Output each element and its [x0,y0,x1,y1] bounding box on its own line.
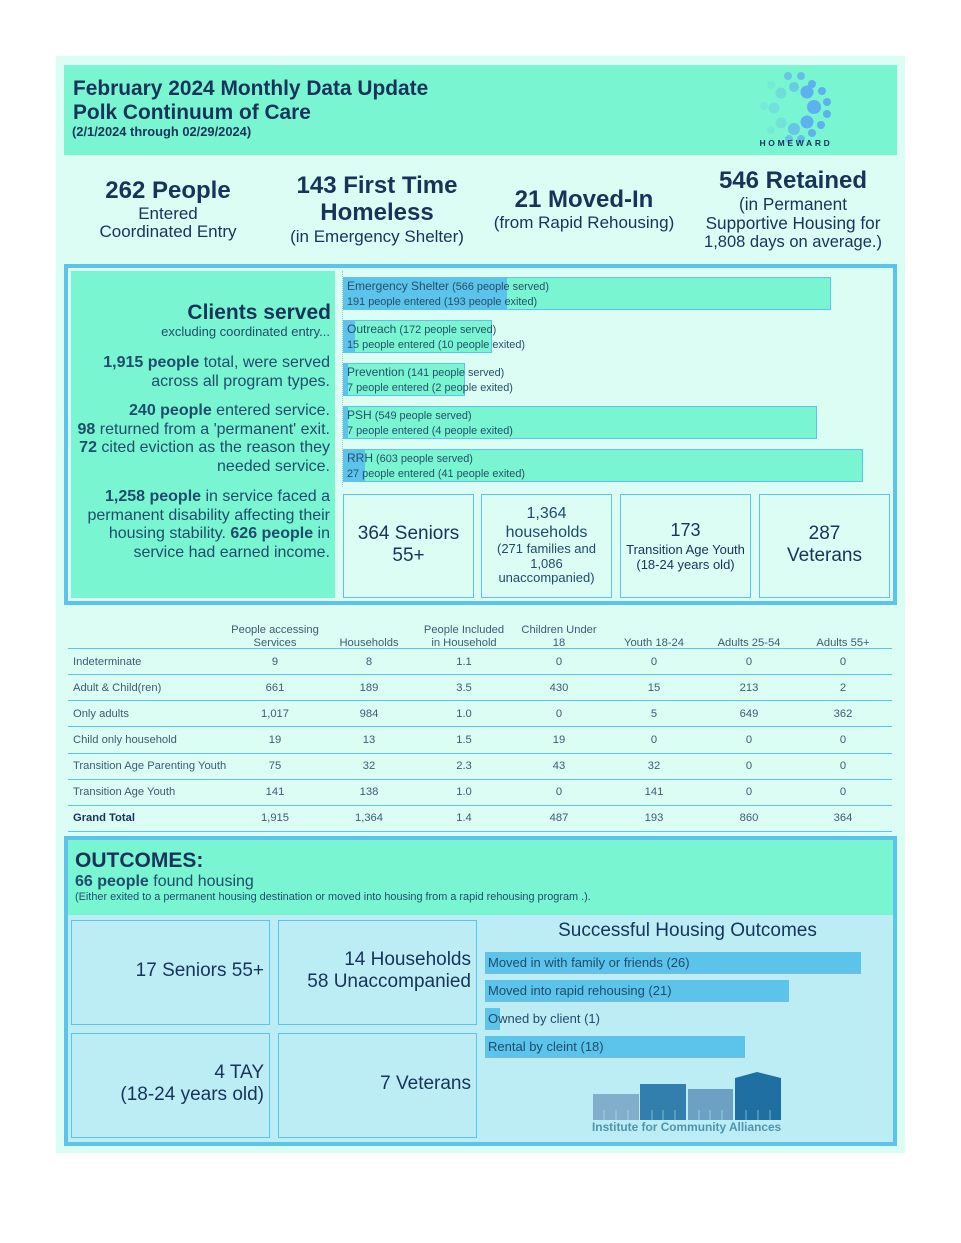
logo: Homeward: HOMEWARD [759,138,833,148]
housing count: 66 people found housing [75,873,254,890]
row: adult and child: 2 [840,682,846,694]
title: February 2024 Monthly Data Update [73,77,428,100]
disability and income: permanent disability affecting their [87,506,330,524]
card: TAY outcome: (18-24 years old) [120,1084,264,1105]
table header: 18 [553,637,565,649]
bar: PSH [343,406,817,439]
row: transition youth: Transition Age Youth [73,786,175,798]
row: child only: 13 [363,734,375,746]
row: grand total: 1,364 [355,812,383,824]
row: grand total: 860 [740,812,758,824]
bar: rental: Rental by cleint (18) [488,1039,604,1054]
card: transition age youth [620,494,751,598]
label: outreach [347,322,525,351]
disability and income: 1,258 people in service faced a [105,488,330,505]
row: transition youth: 0 [746,786,752,798]
row: parenting youth: Transition Age Parenting Youth [73,760,226,772]
entered service: 72 cited eviction as the reason they [79,439,330,456]
card: seniors outcome [71,920,270,1025]
label: prevention [347,365,513,394]
card: seniors [343,494,474,598]
row: transition youth: 141 [645,786,663,798]
table header: Youth 18-24 [624,637,684,649]
row: only adults: 649 [740,708,758,720]
stat: moved in: 21 Moved-In [515,186,653,213]
row: adult and child: 213 [740,682,758,694]
label: RRH [347,451,525,480]
outcomes heading: OUTCOMES: [75,849,203,872]
row: child only: 19 [269,734,281,746]
card: transition age youth: 173 [670,520,701,540]
row: adult and child: 189 [360,682,378,694]
card: transition age youth: Transition Age Youth [626,542,745,556]
card: households outcome [278,920,477,1025]
stat: moved in [494,186,674,232]
row: indeterminate: 0 [556,656,562,668]
row: indeterminate: 1.1 [456,656,472,668]
row: grand total: Grand Total [73,812,135,824]
logo: Institute for Community Alliances [592,1072,781,1134]
card: households [481,494,612,598]
label: emergency shelter: Emergency Shelter (566 people served) [347,279,549,293]
row: indeterminate: 0 [746,656,752,668]
table header: Households [339,637,399,649]
row: parenting youth: 43 [553,760,565,772]
row: transition youth: 0 [840,786,846,798]
table header: Children Under [521,624,597,636]
row: only adults: 1,017 [261,708,289,720]
row: only adults: 362 [834,708,852,720]
title [73,77,428,124]
card: veterans outcome [278,1033,477,1138]
card: seniors outcome: 17 Seniors 55+ [136,960,264,981]
chart heading: Successful Housing Outcomes [558,920,817,941]
row: adult and child: 430 [550,682,568,694]
title: Polk Continuum of Care [73,101,311,124]
text: Owned by client (1) [488,1011,600,1026]
row: adult and child: 3.5 [456,682,472,694]
stat: retained: 546 Retained [719,167,867,194]
stat: first time homeless: Homeless [320,199,434,226]
row: adult and child: 15 [648,682,660,694]
total served [103,354,330,390]
card: households outcome: 14 Households [344,949,471,970]
stat: retained: (in Permanent [739,194,847,214]
total served: across all program types. [151,373,330,390]
label: prevention: Prevention (141 people served) [347,365,504,379]
label: RRH: 27 people entered (41 people exited) [347,468,525,480]
row: parenting youth: 0 [840,760,846,772]
bar: rapid rehousing [485,980,789,1002]
row: transition youth: 1.0 [456,786,472,798]
total served: 1,915 people total, were served [103,354,330,371]
header banner [64,65,897,155]
table header: Adults 25-54 [718,637,780,649]
row: only adults: 5 [651,708,657,720]
panel: outcomes [64,836,897,1146]
row: grand total: 364 [834,812,852,824]
card: veterans outcome: 7 Veterans [380,1073,471,1094]
card: households: (271 families and [497,541,596,556]
row: grand total: 193 [645,812,663,824]
bar: family or friends [485,952,861,974]
disability and income: service had earned income. [133,544,330,560]
card: TAY outcome [71,1033,270,1138]
row: transition youth [68,780,892,806]
row: parenting youth [68,754,892,780]
entered service: 240 people entered service. [129,402,330,419]
panel: clients served [64,264,897,605]
label: prevention: 7 people entered (2 people exited) [347,382,513,394]
bar: prevention [343,363,465,396]
card: veterans [759,494,890,598]
table header: Adults 55+ [816,637,870,649]
bar chart: programs axis [342,271,343,487]
card: veterans: Veterans [787,545,862,566]
table header: People accessing [231,624,319,636]
row: child only: 0 [840,734,846,746]
bar: family or friends: Moved in with family or friends (26) [488,955,690,970]
subheading: excluding coordinated entry... [161,324,330,339]
row: indeterminate: 8 [366,656,372,668]
stat: retained [704,167,882,251]
label: emergency shelter: 191 people entered (193 people exited) [347,296,537,308]
label: PSH: 7 people entered (4 people exited) [347,425,513,437]
entered service: 98 returned from a 'permanent' exit. [78,420,330,438]
stat: people entered [99,177,237,241]
card: households: 1,364 [526,505,567,522]
entered service: needed service. [217,458,330,474]
row: grand total: 1,915 [261,812,289,824]
bar: emergency shelter [343,277,831,310]
bar: RRH [343,449,863,482]
row: transition youth: 141 [266,786,284,798]
stat: people entered: Entered [138,204,198,223]
row: only adults: Only adults [73,708,129,720]
label: outreach: Outreach (172 people served) [347,322,496,336]
card: households outcome: 58 Unaccompanied [307,971,471,992]
row: child only: Child only household [73,734,177,746]
row: transition youth: 138 [360,786,378,798]
label: outreach: 15 people entered (10 people exited) [347,339,525,351]
stat: first time homeless [290,172,464,246]
row: adult and child: Adult & Child(ren) [73,682,161,694]
logo: Homeward [759,72,833,148]
card: households: households [506,524,587,541]
clients served text panel [71,271,335,598]
card: households: unaccompanied) [498,570,595,585]
disability and income: housing stability. 626 people in [109,525,330,542]
heading: Clients served [187,301,331,324]
stat: retained: Supportive Housing for [706,212,880,232]
logo: Institute for Community Alliances: Institute for Community Alliances [592,1120,781,1134]
table header [68,622,892,649]
bar: rental [485,1036,745,1058]
card: seniors: 364 Seniors [358,523,459,544]
date range: (2/1/2024 through 02/29/2024) [72,124,251,139]
card: TAY outcome: 4 TAY [214,1062,264,1083]
card: veterans: 287 [809,523,840,544]
card: transition age youth: (18-24 years old) [636,556,735,572]
row: parenting youth: 0 [746,760,752,772]
data table [68,624,892,832]
row: grand total [68,806,892,832]
row: child only: 19 [553,734,565,746]
disability and income [87,488,330,560]
bar: outreach [343,320,492,353]
row: only adults: 0 [556,708,562,720]
row: child only [68,727,892,754]
card: households: 1,086 [530,556,563,571]
label: PSH [347,408,513,437]
row: only adults: 984 [360,708,378,720]
stat: retained: 1,808 days on average.) [704,233,882,251]
row: only adults: 1.0 [456,708,472,720]
row: parenting youth: 32 [363,760,375,772]
entered service [78,402,330,474]
row: adult and child [68,675,892,701]
background panel [56,56,905,1153]
label: RRH: RRH (603 people served) [347,451,473,465]
stat: first time homeless: (in Emergency Shelter) [290,227,464,246]
row: child only: 0 [651,734,657,746]
row: child only: 1.5 [456,734,472,746]
label: PSH: PSH (549 people served) [347,408,472,422]
bar: rapid rehousing: Moved into rapid rehousing (21) [488,983,672,998]
row: parenting youth: 32 [648,760,660,772]
row: indeterminate: 0 [840,656,846,668]
table header: in Household [431,637,497,649]
card: seniors: 55+ [392,545,425,566]
row: child only: 0 [746,734,752,746]
table header: Services [254,637,296,649]
bar: owned [485,1008,500,1030]
row: grand total: 487 [550,812,568,824]
row: indeterminate: 9 [272,656,278,668]
row: only adults [68,701,892,727]
row: parenting youth: 2.3 [456,760,472,772]
row: parenting youth: 75 [269,760,281,772]
stat: moved in: (from Rapid Rehousing) [494,213,674,232]
stat: people entered: 262 People [105,177,231,204]
table header: People Included [424,624,504,636]
row: grand total: 1.4 [456,812,472,824]
stat: people entered: Coordinated Entry [99,222,237,241]
row: indeterminate [68,649,892,675]
explanation: (Either exited to a permanent housing destination or moved into housing from a rapid rehousing program .). [75,891,591,903]
stat: first time homeless: 143 First Time [297,172,457,199]
outcomes banner [68,840,893,915]
row: adult and child: 661 [266,682,284,694]
row: indeterminate: Indeterminate [73,656,141,668]
row: transition youth: 0 [556,786,562,798]
label: emergency shelter [347,279,549,308]
row: indeterminate: 0 [651,656,657,668]
